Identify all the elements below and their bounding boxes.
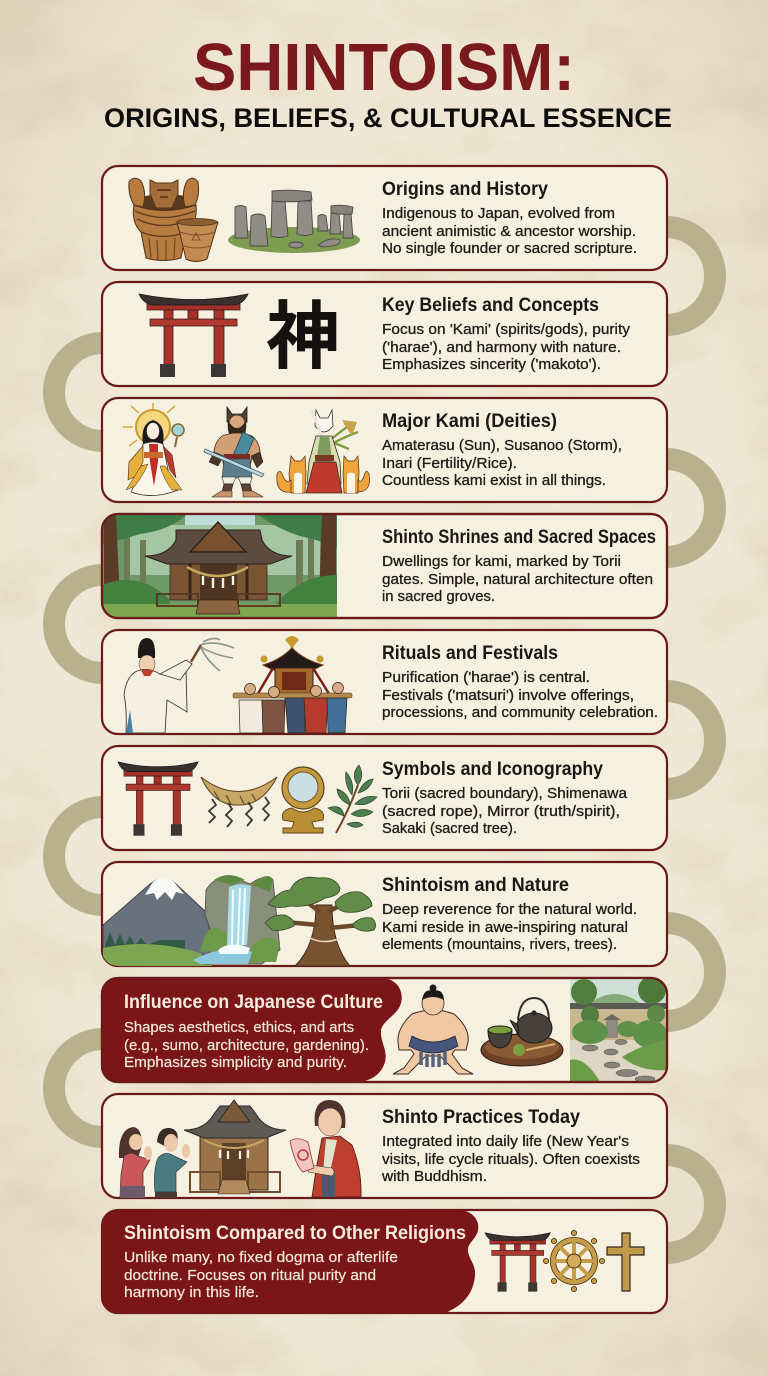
icon: dharma wheel <box>543 1230 605 1292</box>
connector arcs <box>54 227 715 1253</box>
text block: Emphasizes sincerity ('makoto'). <box>382 357 601 373</box>
icon: torii gate <box>118 762 198 836</box>
text block <box>382 554 653 605</box>
heading: Rituals and Festivals <box>382 643 558 664</box>
panel: shintoism and nature <box>102 862 667 966</box>
illustration: forest shrine <box>102 515 337 618</box>
panel: compared to other religions <box>102 1210 667 1313</box>
text block: in sacred groves. <box>382 589 495 605</box>
text block: Inari (Fertility/Rice). <box>382 456 517 472</box>
text block <box>382 670 658 721</box>
text block: Countless kami exist in all things. <box>382 473 606 489</box>
icon: torii gate <box>139 294 248 377</box>
icon: sumo wrestler <box>393 984 473 1074</box>
illustration: worshippers <box>119 1127 190 1198</box>
heading: Influence on Japanese Culture <box>124 992 383 1013</box>
text block: (e.g., sumo, architecture, gardening). <box>124 1038 369 1054</box>
text block: Focus on 'Kami' (spirits/gods), purity <box>382 322 631 338</box>
panel: major kami <box>102 398 667 502</box>
text block: Festivals ('matsuri') involve offerings, <box>382 688 634 704</box>
text block: Torii (sacred boundary), Shimenawa <box>382 786 628 802</box>
icon: kami kanji: 神 <box>266 277 340 384</box>
text block: ('harae'), and harmony with nature. <box>382 340 621 356</box>
panel: influence on japanese culture <box>102 976 667 1082</box>
text block: Unlike many, no fixed dogma or afterlife <box>124 1250 398 1266</box>
text block: ancient animistic & ancestor worship. <box>382 224 636 240</box>
panel: shrines and sacred spaces <box>102 514 667 618</box>
text block: No single founder or sacred scripture. <box>382 241 637 257</box>
text block: processions, and community celebration. <box>382 705 658 721</box>
text block: Emphasizes simplicity and purity. <box>124 1055 347 1071</box>
text block <box>382 902 637 953</box>
heading: Shintoism and Nature <box>382 875 569 896</box>
icon: mikoshi carried by bearers <box>233 636 352 733</box>
text block: Amaterasu (Sun), Susanoo (Storm), <box>382 438 622 454</box>
heading: Origins and History <box>382 179 548 200</box>
heading: Shinto Practices Today <box>382 1107 580 1128</box>
heading: Key Beliefs and Concepts <box>382 295 599 316</box>
panel: origins and history <box>102 166 667 270</box>
text block: elements (mountains, rivers, trees). <box>382 937 617 953</box>
text block <box>382 786 628 837</box>
text block: Deep reverence for the natural world. <box>382 902 637 918</box>
text block: Kami reside in awe-inspiring natural <box>382 920 628 936</box>
text block <box>124 1250 398 1301</box>
illustration: sacred tree <box>265 877 376 966</box>
icon: stone circle <box>228 190 360 253</box>
icon: tea set <box>481 998 563 1066</box>
icon: shimenawa rope <box>201 777 277 827</box>
icon: shinto priest <box>124 638 234 733</box>
illustration: snow-capped mountain <box>103 878 215 966</box>
text block: (sacred rope), Mirror (truth/spirit), <box>382 804 620 820</box>
text block <box>381 1134 640 1185</box>
subtitle: ORIGINS, BELIEFS, & CULTURAL ESSENCE <box>104 103 672 133</box>
text block: Integrated into daily life (New Year's <box>382 1134 629 1150</box>
text block: Shapes aesthetics, ethics, and arts <box>124 1020 354 1036</box>
text block: doctrine. Focuses on ritual purity and <box>124 1268 376 1284</box>
icon: sakaki branch <box>328 765 377 833</box>
title: SHINTOISM: <box>193 30 575 105</box>
icon: jomon pots <box>129 178 218 262</box>
title <box>104 30 672 133</box>
heading: Shintoism Compared to Other Religions <box>124 1223 466 1244</box>
heading: Major Kami (Deities) <box>382 411 557 432</box>
illustration: woman with omamori <box>290 1100 361 1197</box>
illustration: japanese garden <box>570 976 667 1082</box>
text block: visits, life cycle rituals). Often coexists <box>382 1152 640 1168</box>
icon: amaterasu <box>123 403 184 496</box>
red banner <box>102 978 402 1082</box>
illustration: small shrine <box>184 1100 286 1194</box>
icon: torii gate <box>485 1233 550 1292</box>
text block: Dwellings for kami, marked by Torii <box>382 554 621 570</box>
red banner <box>102 1210 478 1313</box>
icon: cross <box>607 1233 644 1291</box>
icon: inari with foxes <box>277 410 370 493</box>
text block <box>382 206 637 257</box>
text block <box>124 1020 369 1071</box>
text block: harmony in this life. <box>124 1285 259 1301</box>
icon: sacred mirror <box>282 767 324 833</box>
panel: symbols and iconography <box>102 746 667 850</box>
heading: Symbols and Iconography <box>382 759 603 780</box>
text block: with Buddhism. <box>381 1169 487 1185</box>
panel: rituals and festivals <box>102 630 667 734</box>
panel: shinto practices today <box>102 1094 667 1198</box>
text block: Purification ('harae') is central. <box>382 670 590 686</box>
heading: Shinto Shrines and Sacred Spaces <box>382 527 656 548</box>
text block: gates. Simple, natural architecture often <box>382 572 653 588</box>
text block <box>382 322 631 373</box>
illustration: waterfall <box>193 875 280 964</box>
text block: Sakaki (sacred tree). <box>382 821 517 837</box>
text block: Indigenous to Japan, evolved from <box>382 206 615 222</box>
icon: susanoo <box>204 407 264 497</box>
text block <box>382 438 622 489</box>
panel: key beliefs and concepts <box>102 277 667 386</box>
